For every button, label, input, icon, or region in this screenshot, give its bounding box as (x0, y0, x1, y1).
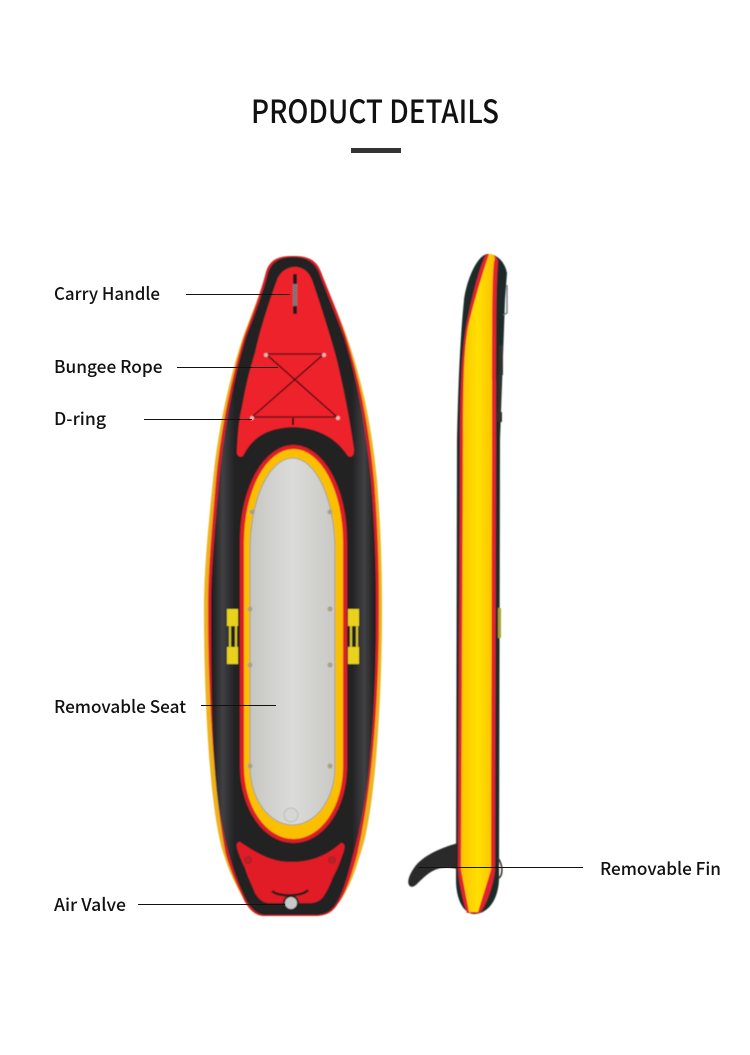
title: PRODUCT DETAILS (251, 87, 499, 133)
label: D-ring: D-ring (54, 406, 106, 431)
side fittings (497, 345, 503, 638)
side red stripe (458, 254, 498, 913)
side hull (456, 254, 507, 914)
red stern deck (237, 842, 345, 903)
cockpit yellow rim (244, 449, 343, 839)
D-rings (250, 353, 340, 420)
red bow deck (237, 267, 354, 457)
removable seat (250, 458, 335, 825)
stern handle (272, 890, 308, 895)
left side handle (227, 609, 238, 664)
side yellow body (461, 254, 495, 912)
label: Air Valve: Air Valve (54, 892, 126, 917)
right side handle (348, 609, 359, 664)
board: side view (408, 254, 507, 914)
label: Removable Fin: Removable Fin (600, 856, 721, 881)
board: top view (204, 256, 382, 916)
title underline (351, 148, 401, 153)
seat valve (284, 808, 298, 822)
red stripe (208, 256, 379, 916)
air valve (284, 896, 298, 910)
carry handle (293, 274, 297, 314)
fin (408, 843, 458, 887)
label: Carry Handle: Carry Handle (54, 281, 160, 306)
label: Removable Seat: Removable Seat (54, 694, 186, 719)
stern deck grommets (244, 856, 336, 864)
bungee rope (252, 354, 337, 425)
outer yellow rail (204, 256, 382, 916)
label: Bungee Rope: Bungee Rope (54, 354, 163, 379)
black hull (211, 257, 376, 915)
side rear ring (498, 858, 502, 878)
side carry handle (503, 285, 507, 315)
cockpit red rim (240, 445, 347, 843)
seat clips (248, 510, 332, 768)
